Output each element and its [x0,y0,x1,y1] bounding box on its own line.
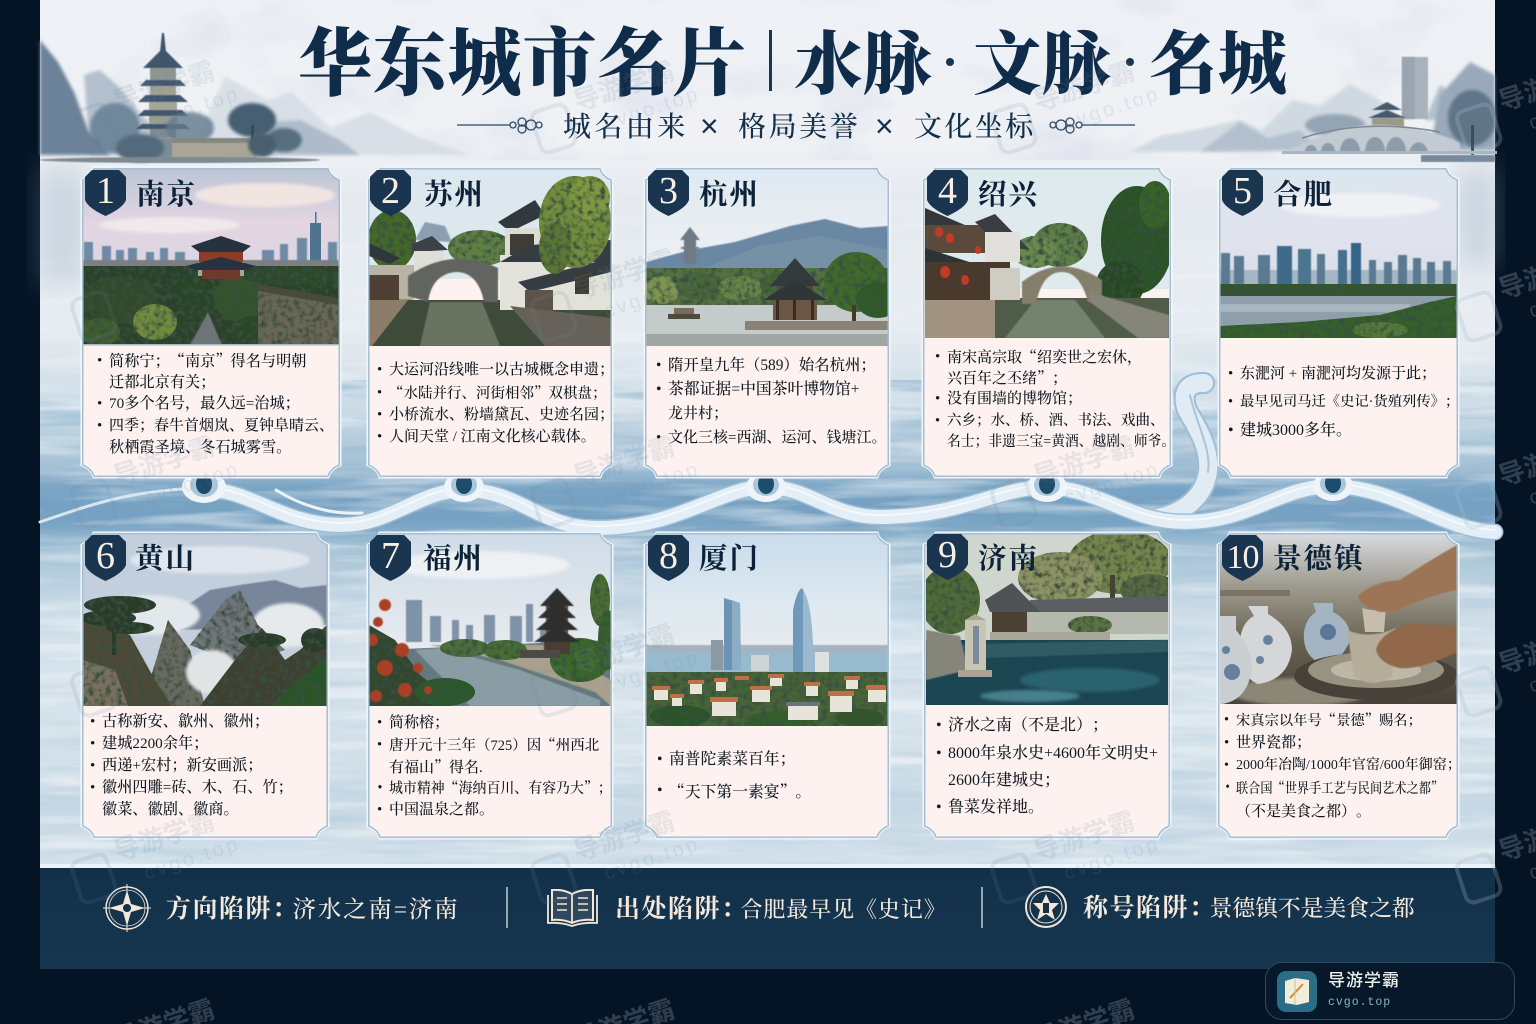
panel: 苏州 [366,166,614,478]
text: 福州 facts: 有福山”得名. [389,756,483,777]
text: 福州 facts: • [377,780,382,796]
text: 绍兴 facts: 没有围墙的博物馆； [947,391,1082,407]
text: 绍兴 facts: • [935,413,940,429]
photo: Nanjing wall and skyline [80,166,342,478]
icon: map logo [1277,971,1317,1012]
text: 厦门 facts: “天下第一素宴”。 [669,779,811,802]
panel: 济南 [922,532,1172,840]
photo: Suzhou canal and stone bridge [366,166,614,478]
text: 景德镇 facts: • [1226,780,1230,795]
panel: 合肥 [1218,166,1460,478]
text: 厦门 facts: • [657,782,663,799]
subtitle with ornaments: 城名由来 [563,105,689,145]
text: 苏州 facts: • [377,407,382,423]
watermarks: cvgo.top [1061,83,1163,134]
photo: Jingdezhen potter's wheel and porcelain [1216,532,1460,840]
watermarks: cvgo.top [601,833,703,884]
watermarks: 导游学霸 [1030,806,1138,867]
photo: Huangshan peaks, pines and clouds [80,532,330,840]
footer item: book icon and source trap [547,889,947,927]
text: 黄山 facts: • [90,713,95,730]
panel: 黄山 [80,532,330,840]
watermarks: 导游学霸 [110,431,218,492]
badge: 8 [648,535,689,581]
text: 黄山 facts: 徽菜、徽剧、徽商。 [102,801,239,818]
text: 景德镇 facts: 世界瓷都； [1236,735,1311,751]
photo: Hangzhou West Lake [644,166,890,478]
panel: 绍兴 [922,166,1175,478]
subtitle with ornaments: × [875,108,894,144]
heading: 杭州: 杭州 [699,180,760,211]
panel: 景德镇 [1216,532,1461,840]
text: 福州 facts [377,714,612,818]
watermarks: cvgo.top [141,833,243,884]
title: 名城 [1149,9,1287,108]
watermarks: 导游学霸 [570,244,678,305]
footer item: compass icon and direction trap [103,884,459,932]
panel: 福州 [366,532,614,840]
right landscape: tower, arched bridge and mountains [1130,57,1497,265]
subtitle with ornaments: 格局美誉 [738,105,860,145]
text: 济南 facts: • [936,799,942,816]
text: 苏州 facts: • [377,385,382,401]
watermarks: cvgo.top [601,271,703,322]
text: 合肥 facts: 东淝河 + 南淝河均发源于此； [1240,366,1436,382]
text: 厦门 facts [657,750,811,802]
text: 黄山 facts: 建城2200余年； [102,735,208,752]
divider [981,887,983,928]
text: 景德镇 facts: 联合国“世界手工艺与民间艺术之都” [1236,778,1443,798]
title: 华东城市名片 [298,5,747,111]
text: 合肥 facts [1228,365,1459,439]
watermarks: 导游学霸 [570,56,678,117]
photo: Fuzhou river, pagoda and red blossoms [366,532,614,840]
watermarks: cvgo.top [601,83,703,134]
watermarks: 导游学霸 [570,806,678,867]
icon: compass [103,884,151,932]
text: 福州 facts: 唐开元十三年（725）因“州西北 [389,734,599,755]
text: 杭州 facts: 文化三核=西湖、运河、钱塘江。 [668,430,886,446]
heading: 苏州: 苏州 [424,180,485,211]
badge: 2 [370,170,411,216]
watermarks: cvgo.top [1061,833,1163,884]
text: 称号陷阱: 称号陷阱：景德镇不是美食之都 [1083,895,1415,922]
badge: 4: 4 [938,170,957,212]
text: 福州 facts: • [377,802,382,818]
badge: 3 [648,170,689,216]
watermarks: cvgo.top [601,458,703,509]
heading: 济南: 济南 [978,544,1039,575]
decorative river: S-curve and waves [40,383,1495,532]
badge: 5 [1222,170,1263,216]
text: 南京 facts: 迁都北京有关； [109,374,215,391]
text: 景德镇 facts: 宋真宗以年号“景德”赐名； [1236,710,1422,730]
text: 合肥 facts: • [1228,422,1234,439]
text: 景德镇 facts [1224,710,1461,821]
text: 黄山 facts: • [90,735,95,752]
badge: 7 [370,535,411,581]
text: 景德镇 facts: （不是美食之都）。 [1236,800,1371,821]
text: 合肥 facts: 最早见司马迁《史记·货殖列传》； [1240,394,1459,410]
watermarks: cvgo.top [141,83,243,134]
text: 景德镇 facts: • [1224,758,1229,773]
badge: 8: 8 [659,535,678,577]
left landscape: mountains, pagoda and city wall [40,33,470,285]
text: 出处陷阱: 出处陷阱：合肥最早见《史记》 [615,896,947,923]
text: 厦门 facts: • [657,751,663,768]
title [298,5,1287,111]
text: 绍兴 facts: 名士；非遗三宝=黄酒、越剧、师爷。 [947,434,1175,450]
text: 济南 facts: • [936,745,942,762]
text: 苏州 facts: “水陆并行、河街相邻”双棋盘； [389,382,606,403]
text: 苏州 facts: 大运河沿线唯一以古城概念申遗； [389,362,614,378]
text: 苏州 facts [377,361,614,445]
text: 绍兴 facts: • [935,391,940,407]
subtitle with ornaments [457,105,1135,145]
text: 绍兴 facts [935,346,1175,450]
text: 杭州 facts: 隋开皇九年（589）始名杭州； [668,357,876,374]
badge: 10 [1222,535,1263,581]
river nodes [182,471,1353,503]
badge: 9: 9 [938,534,957,576]
badge: 6: 6 [96,535,115,577]
heading: 黄山: 黄山 [135,544,196,575]
text: 福州 facts: 中国温泉之都。 [389,802,494,818]
text: 济南 facts: 鲁菜发祥地。 [948,799,1044,816]
badge: 1 [85,170,126,216]
text: 合肥 facts: 建城3000多年。 [1240,422,1352,439]
badge: 6 [85,535,126,581]
text: 南京 facts: • [97,352,102,369]
text: 济南 facts: • [936,717,942,734]
text: 南京 facts: • [97,395,102,412]
text: 杭州 facts: • [656,357,661,374]
watermarks: 导游学霸 [570,619,678,680]
text: 济南 facts: 8000年泉水史+4600年文明史+ [948,745,1158,762]
text: 绍兴 facts: 兴百年之丕绪”； [947,367,1067,388]
watermarks: 导游学霸 [1030,431,1138,492]
text: 福州 facts: 简称榕； [389,715,449,731]
divider [506,887,508,928]
heading: 南京: 南京 [136,180,197,211]
subtitle with ornaments: 文化坐标 [914,105,1036,145]
text: 杭州 facts [656,356,886,446]
photo: Jinan spring pool [922,532,1172,840]
heading: 景德镇: 景德镇 [1273,544,1365,575]
badge: 10: 10 [1226,539,1258,576]
text: 绍兴 facts: 南宋高宗取“绍奕世之宏休， [947,346,1142,367]
text: 景德镇 facts: • [1224,712,1229,728]
watermarks: 导游学霸 [110,56,218,117]
badge: 1: 1 [96,170,115,212]
text: 福州 facts: • [377,737,382,753]
watermarks: 导游学霸 [1030,56,1138,117]
icon: seal medallion [1025,886,1067,928]
text: 苏州 facts: 小桥流水、粉墙黛瓦、史迹名园； [389,407,614,423]
badge: 3: 3 [659,170,678,212]
heading: 厦门: 厦门 [699,544,760,575]
text: 福州 facts: 城市精神“海纳百川、有容乃大”； [389,777,612,798]
subtitle with ornaments: × [700,108,719,144]
title: 水脉 [794,9,932,108]
text: 济南 facts [936,716,1158,816]
text: 济南 facts: 2600年建城史； [948,772,1060,789]
text: 黄山 facts: 古称新安、歙州、徽州； [102,713,269,730]
text: 杭州 facts: 龙井村； [668,406,728,422]
watermarks: 导游学霸 [110,806,218,867]
text: 福州 facts: • [377,715,382,731]
text: 绍兴 facts: • [935,349,940,365]
text: 济南 facts: 济水之南（不是北）； [948,717,1108,734]
text: 方向陷阱: 方向陷阱：济水之南=济南 [166,896,459,923]
title: 文脉 [973,9,1111,108]
watermarks: cvgo.top [601,646,703,697]
text: 苏州 facts: 人间天堂 / 江南文化核心载体。 [389,429,596,445]
brand badge [1265,962,1515,1020]
brand name and url [1328,971,1400,1009]
badge: 9 [927,534,968,580]
photo: Xiamen twin towers and hillside [644,532,890,840]
heading: 合肥: 合肥 [1273,180,1334,211]
text: 苏州 facts: • [377,362,382,378]
text: 南京 facts: 70多个名号，最久远=治城； [109,395,300,412]
badge: 5: 5 [1233,170,1252,212]
heading: 福州: 福州 [423,544,484,575]
panel: 南京 [80,166,342,478]
text: 合肥 facts: • [1228,394,1233,410]
panel: 杭州 [644,166,890,478]
text: 苏州 facts: • [377,429,382,445]
text: 南京 facts: 简称宁；“南京”得名与明朝 [109,350,306,371]
text: 南京 facts: 秋栖霞圣境、冬石城雾雪。 [109,439,291,456]
text: 黄山 facts: 西递+宏村；新安画派； [102,757,262,774]
brand name and url: 导游学霸 [1328,971,1400,990]
text: 南京 facts [97,350,334,456]
photo: Hefei skyline and lake [1218,166,1460,478]
panel: 厦门 [644,532,890,840]
footer band [40,864,1495,969]
text: 南京 facts: 四季；春牛首烟岚、夏钟阜晴云、 [109,418,334,434]
heading: 绍兴: 绍兴 [978,180,1039,211]
badge: 2: 2 [381,170,400,212]
watermarks: cvgo.top [1061,458,1163,509]
text: 黄山 facts: • [90,757,95,774]
icon: open book [547,889,598,927]
text: 黄山 facts [90,712,293,818]
text: 合肥 facts: • [1228,366,1233,382]
photo: Shaoxing water town [922,166,1172,478]
text: 黄山 facts: • [90,779,95,796]
brand name and url: cvgo.top [1328,996,1391,1009]
text: 景德镇 facts: 2000年冶陶/1000年官窑/600年御窑； [1236,758,1461,773]
badge: 7: 7 [381,535,400,577]
text: 黄山 facts: 徽州四雕=砖、木、石、竹； [102,779,293,796]
text: 杭州 facts: • [656,430,661,446]
text: 杭州 facts: • [656,381,662,398]
text: 绍兴 facts: 六乡；水、桥、酒、书法、戏曲、 [947,413,1164,429]
text: 杭州 facts: 茶都证据=中国茶叶博物馆+ [668,381,860,398]
text: 景德镇 facts: • [1224,735,1229,751]
text: 南京 facts: • [97,418,102,434]
watermarks: 导游学霸 [570,431,678,492]
text: 厦门 facts: 南普陀素菜百年； [669,751,795,768]
watermarks: cvgo.top [141,458,243,509]
footer item: seal icon and title trap [1025,886,1415,928]
badge: 4 [927,170,968,216]
